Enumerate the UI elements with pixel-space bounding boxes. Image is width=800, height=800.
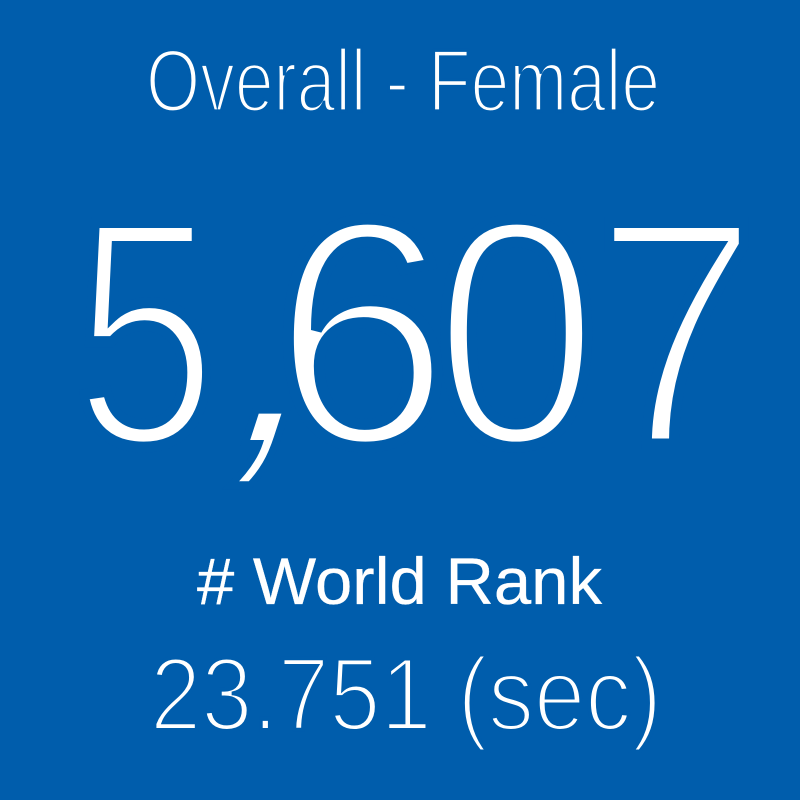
time value: 23.751 (sec) [150, 637, 662, 753]
main figure: 0 [434, 153, 599, 513]
main figure: 5 [74, 152, 217, 512]
metric label: # World Rank [197, 544, 603, 618]
main figure [74, 152, 759, 513]
main figure: , [193, 154, 399, 513]
main figure: 6 [272, 154, 451, 513]
main figure: 7 [594, 153, 759, 513]
title: Overall - Female [146, 31, 660, 130]
